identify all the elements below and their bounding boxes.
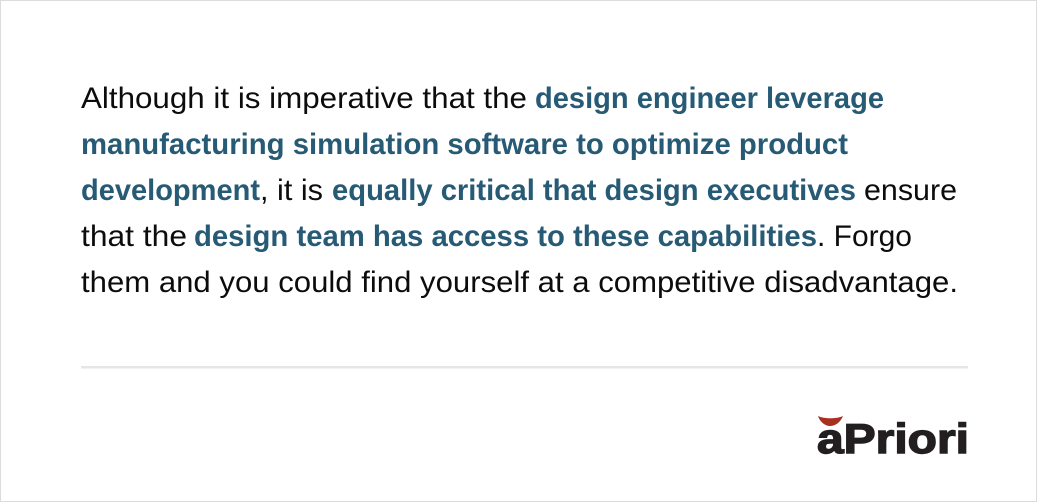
- line 3: , it is: [260, 174, 323, 207]
- line 4: . Forgo: [817, 220, 912, 253]
- line 3: [81, 174, 957, 207]
- line 2: manufacturing simulation software to optimize product: [81, 128, 848, 161]
- line 4: that the: [81, 220, 187, 253]
- line 1: design engineer leverage: [535, 82, 884, 115]
- line 3: equally critical that design executives: [332, 174, 856, 207]
- divider: [81, 366, 968, 368]
- line 4: design team has access to these capabilities: [194, 220, 817, 253]
- quote paragraph: [81, 82, 958, 299]
- line 5: them and you could find yourself at a competitive disadvantage.: [81, 266, 958, 299]
- line 3: ensure: [864, 174, 957, 207]
- icon: red smile accent: [818, 416, 843, 426]
- line 1: [81, 82, 884, 115]
- line 3: development: [81, 174, 260, 207]
- logo wordmark: aPriori: [817, 415, 969, 462]
- aPriori logo: [817, 415, 969, 462]
- line 1: Although it is imperative that the: [81, 82, 527, 115]
